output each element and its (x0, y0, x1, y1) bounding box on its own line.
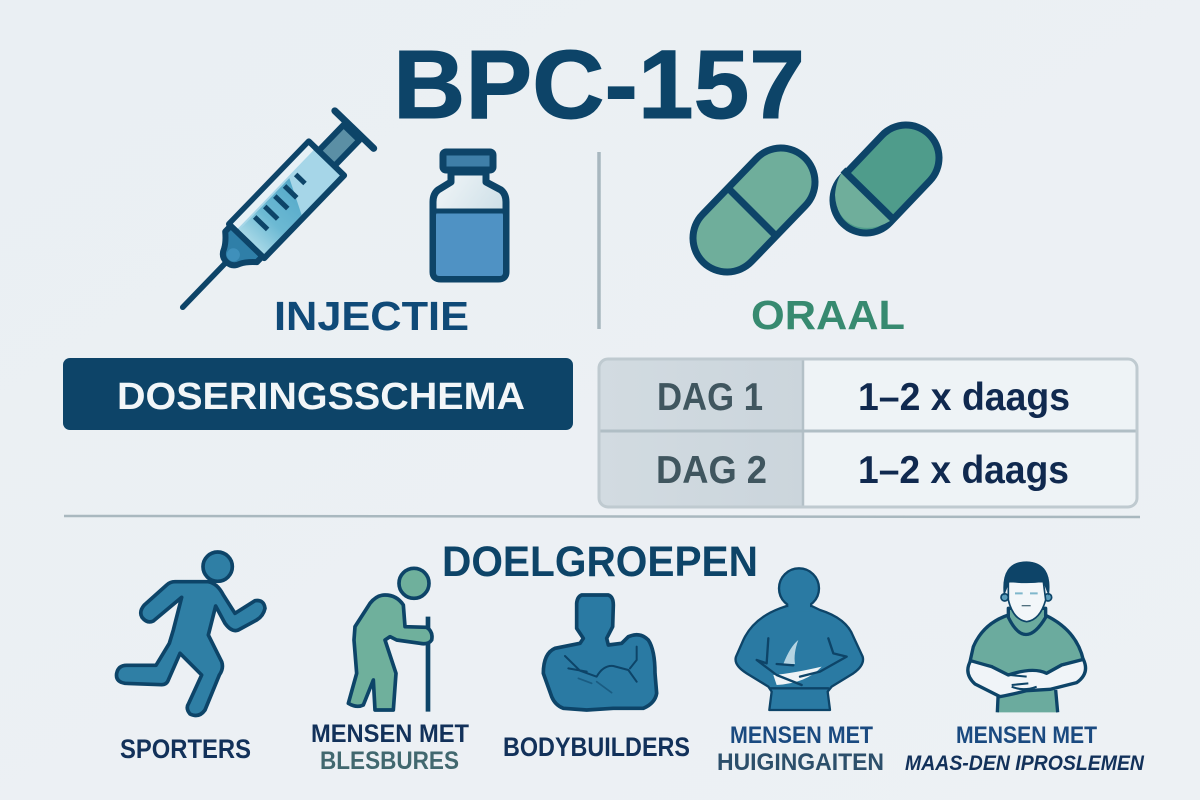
label: mensen met blesbures (311, 720, 469, 775)
row: day 2 (656, 449, 1069, 492)
icon: bodybuilder (543, 595, 657, 710)
icon: runner (117, 552, 265, 715)
label: injectie: INJECTIE (274, 293, 469, 339)
icon: capsule left (727, 182, 781, 238)
label: bodybuilders: BODYBUILDERS (503, 732, 690, 762)
label: mensen met huigingaiten: HUIGINGAITEN (717, 749, 884, 776)
row: day 1: DAG 1 (657, 376, 763, 419)
label: mensen met huigingaiten (717, 722, 884, 776)
label: mensen met maas-den iproslemen: MENSEN MET (956, 722, 1097, 749)
label: mensen met blesbures: MENSEN MET (311, 720, 469, 748)
title: BPC-157 (393, 30, 805, 139)
row: day 1 (657, 376, 1070, 419)
row: day 1: 1–2 x daags (858, 376, 1070, 419)
icon: elderly person with cane (348, 568, 432, 712)
label: mensen met maas-den iproslemen: MAAS-DEN IPROSLEMEN (905, 752, 1145, 775)
row: day 2: 1–2 x daags (858, 449, 1069, 492)
icon: man holding belly (968, 562, 1086, 712)
label: mensen met maas-den iproslemen (905, 722, 1145, 775)
icon: syringe (163, 111, 374, 326)
icon: capsule right (835, 158, 906, 228)
label: mensen met huigingaiten: MENSEN MET (730, 722, 873, 749)
table: dosing schedule (599, 359, 1137, 507)
row: day 2: DAG 2 (656, 449, 767, 492)
label: oraal: ORAAL (751, 292, 905, 338)
vertical divider (597, 152, 601, 329)
icon: vial (433, 152, 506, 279)
banner: doseringsschema (63, 358, 573, 430)
banner: doseringsschema: DOSERINGSSCHEMA (117, 376, 525, 418)
label: sporters: SPORTERS (120, 734, 251, 764)
horizontal divider (64, 516, 1140, 517)
label: mensen met blesbures: BLESBURES (320, 747, 459, 775)
heading: doelgroepen: DOELGROEPEN (442, 538, 758, 586)
icon: person with stomach complaint (736, 568, 863, 710)
